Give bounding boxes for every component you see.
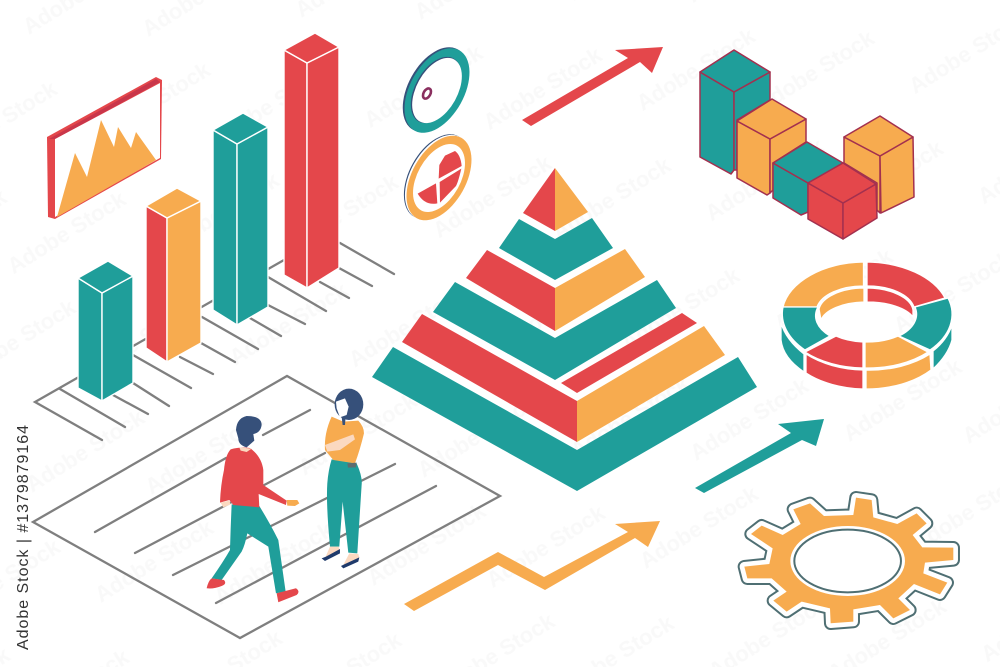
block orange right xyxy=(844,116,914,213)
block teal tall xyxy=(700,50,770,174)
donut side walls xyxy=(781,323,952,389)
donut chart xyxy=(781,262,952,389)
woman shoes xyxy=(322,549,359,568)
woman collar xyxy=(342,417,346,425)
block red cube xyxy=(808,163,877,239)
target dial icon xyxy=(389,36,483,144)
gear hole xyxy=(790,526,905,596)
isometric blocks chart xyxy=(700,50,914,239)
pie chart dial icon xyxy=(390,123,485,231)
block teal low xyxy=(773,142,843,215)
orange rising arrow xyxy=(404,521,660,611)
pyramid xyxy=(372,168,757,491)
man shoes xyxy=(207,578,298,602)
gear icon xyxy=(744,498,953,623)
pyramid layer 4 xyxy=(433,280,676,380)
bar 3 teal xyxy=(213,113,268,325)
woman legs xyxy=(327,459,362,553)
woman feet xyxy=(325,547,359,565)
bar 4 red xyxy=(284,33,339,288)
bar 1 teal xyxy=(78,261,133,401)
red trend arrow xyxy=(522,47,663,126)
pyramid apex xyxy=(523,168,588,231)
bar chart xyxy=(35,33,394,440)
man sweater xyxy=(220,448,287,507)
woman arm xyxy=(325,434,355,452)
woman top xyxy=(325,417,364,463)
pyramid layer 5 xyxy=(402,313,725,442)
dial centre ring xyxy=(421,87,433,100)
man neck xyxy=(239,447,252,452)
man hand left xyxy=(221,501,231,507)
pyramid layer 2 xyxy=(499,218,613,280)
woman hair xyxy=(335,389,363,420)
people talking xyxy=(207,389,364,602)
floor plan with stripes xyxy=(33,376,500,638)
block orange tall xyxy=(737,99,806,195)
woman standing xyxy=(322,389,364,568)
chart floor grid xyxy=(35,243,394,440)
donut inner walls xyxy=(819,288,913,320)
vertical image credit: Adobe Stock | #1379879164 xyxy=(15,425,32,650)
pyramid base xyxy=(372,347,757,491)
man walking xyxy=(207,416,299,602)
man hand right xyxy=(287,500,299,506)
chart screen with area graph xyxy=(47,77,162,219)
woman belt xyxy=(347,463,357,468)
pyramid layer 3 xyxy=(466,249,645,331)
pie slices xyxy=(418,151,462,204)
man legs xyxy=(212,504,286,593)
donut top segments xyxy=(782,262,952,368)
man hair xyxy=(236,416,262,447)
woman face xyxy=(336,398,349,417)
bar 2 red and orange xyxy=(146,188,201,362)
teal rising arrow xyxy=(695,419,824,493)
